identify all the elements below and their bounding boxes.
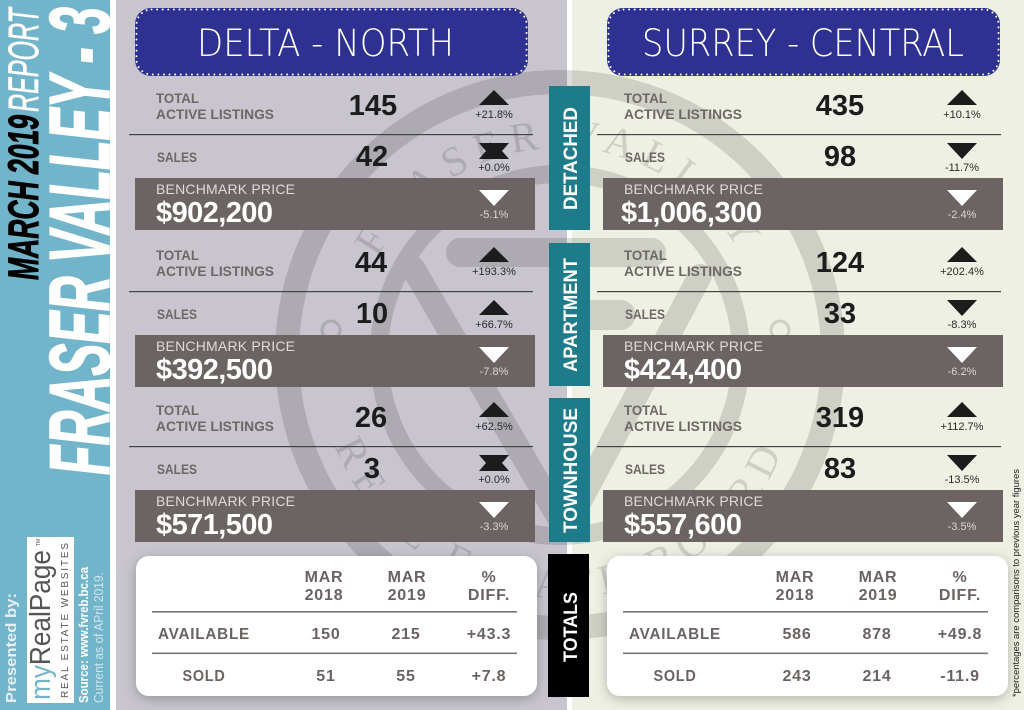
tab: Totals — [548, 554, 589, 697]
panel: Delta North detached: +21.8% — [475, 109, 513, 121]
table: Surrey Central totals: 2018 — [776, 587, 814, 604]
table: Surrey Central totals: AVAILABLE — [629, 626, 721, 643]
panel: Surrey Central apartment: SALES — [625, 306, 665, 322]
panel: Delta North townhouse: +62.5% — [475, 421, 513, 433]
panel: Delta North apartment: +193.3% — [472, 266, 516, 278]
panel: Surrey Central detached: 98 — [824, 141, 856, 173]
watermark: board logo — [276, 70, 844, 640]
panel: Delta North detached — [129, 90, 535, 230]
panel: Delta North detached: BENCHMARK PRICE — [156, 181, 295, 197]
panel: Surrey Central townhouse: 319 — [816, 402, 864, 434]
heading: Delta - North: DELTA - NORTH — [197, 22, 454, 65]
tab: Apartment — [549, 243, 590, 386]
panel: Surrey Central apartment: $424,400 — [624, 354, 742, 386]
panel: Surrey Central apartment: -6.2% — [948, 366, 977, 378]
panel: Delta North townhouse: -3.3% — [480, 521, 509, 533]
table: Delta North totals: 215 — [391, 626, 421, 643]
table: Surrey Central totals: 214 — [862, 668, 892, 685]
table: Surrey Central totals: 2019 — [859, 587, 897, 604]
panel: Surrey Central apartment: ACTIVE LISTINGS — [624, 263, 742, 279]
panel: right background — [572, 0, 1024, 710]
panel: Surrey Central detached: +10.1% — [943, 109, 981, 121]
panel: Delta North apartment: $392,500 — [156, 354, 273, 386]
heading: Delta - North — [135, 8, 528, 76]
panel: Surrey Central apartment: -8.3% — [948, 319, 977, 331]
text: presented by: Presented by: — [3, 593, 20, 703]
panel: Surrey Central detached — [597, 90, 1003, 230]
panel: Delta North detached: ACTIVE LISTINGS — [156, 106, 274, 122]
panel: Surrey Central apartment: 124 — [816, 247, 864, 279]
table: Delta North totals: 2018 — [305, 587, 343, 604]
panel: Delta North townhouse: 26 — [355, 402, 387, 434]
tab: Townhouse — [549, 398, 590, 542]
table: Surrey Central totals: 586 — [782, 626, 812, 643]
table: Surrey Central totals: MAR — [859, 569, 897, 586]
watermark: board logo: FRASER VALLEY — [354, 122, 761, 256]
panel: Delta North apartment: +66.7% — [475, 319, 513, 331]
tab: Detached: DETACHED — [561, 107, 582, 210]
subtitle: March 2019: MARCH 2019 — [0, 115, 48, 280]
text: source: Source: www.fvreb.bc.ca — [76, 566, 91, 703]
panel: Delta North detached: +0.0% — [478, 162, 510, 174]
panel: Delta North townhouse: SALES — [157, 461, 197, 477]
panel: Surrey Central apartment: BENCHMARK PRICE — [624, 338, 763, 354]
panel: Surrey Central detached: ACTIVE LISTINGS — [624, 106, 742, 122]
panel: left background — [116, 0, 567, 710]
panel: Delta North detached: TOTAL — [156, 90, 199, 106]
table: Delta North totals: 2019 — [388, 587, 426, 604]
tab: Totals: TOTALS — [561, 592, 582, 662]
table: Delta North totals: 150 — [311, 626, 341, 643]
logo: myRealPage: myRealPage — [25, 550, 57, 700]
panel: Surrey Central apartment: +202.4% — [940, 266, 984, 278]
table: Delta North totals: AVAILABLE — [158, 626, 250, 643]
panel: Surrey Central townhouse: $557,600 — [624, 509, 742, 541]
table: Delta North totals: DIFF. — [468, 587, 510, 604]
panel: Delta North detached: 145 — [349, 90, 397, 122]
panel: Delta North apartment: 44 — [355, 247, 387, 279]
panel: Surrey Central townhouse: BENCHMARK PRICE — [624, 493, 763, 509]
text: current date: Current as of APril 2019. — [91, 572, 106, 703]
table: Delta North totals: SOLD — [182, 668, 226, 685]
panel: Surrey Central townhouse: 83 — [824, 453, 856, 485]
logo: myRealPage: REAL ESTATE WEBSITES — [60, 543, 71, 698]
panel: Surrey Central apartment: TOTAL — [624, 247, 667, 263]
panel: Delta North apartment: BENCHMARK PRICE — [156, 338, 295, 354]
table: Surrey Central totals: SOLD — [654, 668, 696, 685]
table: Delta North totals: 51 — [316, 668, 336, 685]
panel: Surrey Central detached: TOTAL — [624, 90, 667, 106]
table: Surrey Central totals: DIFF. — [939, 587, 981, 604]
panel: Surrey Central townhouse: -3.5% — [948, 521, 977, 533]
table: Delta North totals: 55 — [396, 668, 416, 685]
panel: Surrey Central apartment — [597, 247, 1003, 387]
sidebar — [0, 0, 128, 710]
heading: Surrey - Central: SURREY - CENTRAL — [642, 22, 964, 65]
panel: Surrey Central townhouse: +112.7% — [941, 421, 984, 433]
panel: Delta North detached: $902,200 — [156, 197, 273, 229]
table: Delta North totals: +7.8 — [472, 668, 506, 685]
panel: Surrey Central townhouse: TOTAL — [624, 402, 667, 418]
panel: Delta North townhouse: 3 — [364, 453, 380, 485]
watermark: board logo: REAL ESTATE BOARD — [334, 434, 778, 598]
table: Delta North totals — [136, 556, 537, 696]
panel: Delta North townhouse: BENCHMARK PRICE — [156, 493, 295, 509]
panel: Delta North apartment: SALES — [157, 306, 197, 322]
logo: myRealPage: TM — [36, 539, 42, 546]
table: Surrey Central totals: 243 — [782, 668, 812, 685]
table: Delta North totals: MAR — [388, 569, 426, 586]
tab: Townhouse: TOWNHOUSE — [561, 408, 582, 533]
panel: Surrey Central detached: BENCHMARK PRICE — [624, 181, 763, 197]
panel: Surrey Central townhouse — [597, 402, 1003, 542]
panel: Surrey Central apartment: 33 — [824, 298, 856, 330]
panel: Surrey Central townhouse: SALES — [625, 461, 665, 477]
panel: Delta North apartment — [129, 247, 535, 387]
panel: Delta North detached: 42 — [356, 141, 388, 173]
footnote: *percentages are comparisons to previous year figures — [1011, 469, 1022, 697]
panel: Surrey Central detached: -2.4% — [948, 209, 977, 221]
logo: myRealPage — [25, 537, 74, 703]
heading: Surrey - Central — [607, 8, 1000, 76]
table: Surrey Central totals: 878 — [862, 626, 892, 643]
table: Surrey Central totals — [607, 556, 1008, 696]
panel: Surrey Central detached: 435 — [816, 90, 864, 122]
table: Surrey Central totals: +49.8 — [938, 626, 982, 643]
table: Delta North totals: % — [481, 569, 497, 586]
panel: Delta North townhouse: $571,500 — [156, 509, 273, 541]
panel: Delta North detached: -5.1% — [480, 209, 509, 221]
panel: Delta North townhouse: ACTIVE LISTINGS — [156, 418, 274, 434]
panel: Surrey Central townhouse: ACTIVE LISTINGS — [624, 418, 742, 434]
panel: Delta North townhouse — [129, 402, 535, 542]
panel: Delta North apartment: TOTAL — [156, 247, 199, 263]
panel: Delta North detached: SALES — [157, 149, 197, 165]
panel: Surrey Central detached: $1,006,300 — [621, 197, 762, 229]
tab: Apartment: APARTMENT — [561, 258, 582, 372]
table: Surrey Central totals: % — [952, 569, 968, 586]
table: Surrey Central totals: -11.9 — [940, 668, 980, 685]
panel: Surrey Central townhouse: -13.5% — [945, 474, 980, 486]
panel: Surrey Central detached: SALES — [625, 149, 665, 165]
table: Delta North totals: MAR — [305, 569, 343, 586]
panel: Delta North apartment: ACTIVE LISTINGS — [156, 263, 274, 279]
tab: Detached — [549, 86, 590, 230]
table: Surrey Central totals: MAR — [776, 569, 814, 586]
table: Delta North totals: +43.3 — [467, 626, 511, 643]
panel: Surrey Central detached: -11.7% — [945, 162, 979, 174]
panel: Delta North townhouse: TOTAL — [156, 402, 199, 418]
panel: Delta North apartment: -7.8% — [480, 366, 509, 378]
panel: Delta North townhouse: +0.0% — [478, 474, 510, 486]
panel: Delta North apartment: 10 — [356, 298, 388, 330]
